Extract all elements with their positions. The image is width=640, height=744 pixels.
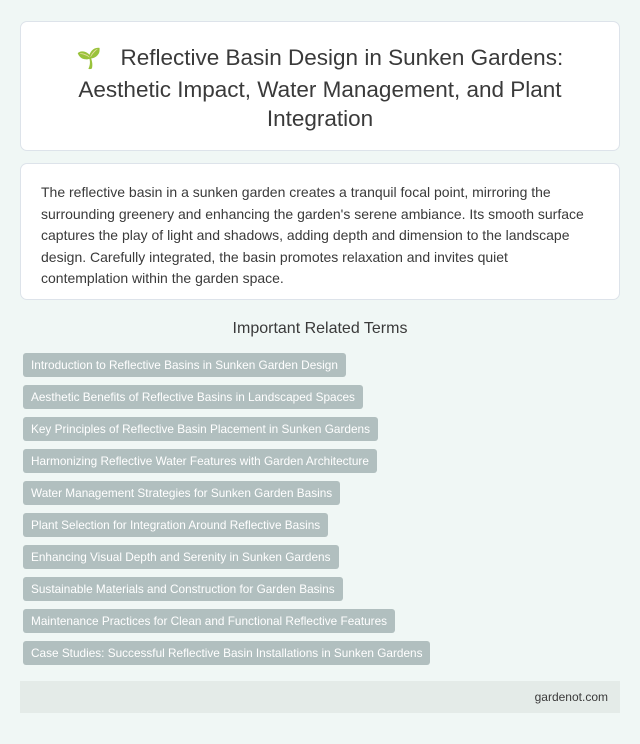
tag 5: [23, 481, 340, 505]
tag 3: Key Principles of Reflective Basin Placement in Sunken Gardens: [31, 422, 370, 436]
tag 8: [23, 577, 343, 601]
description card: [20, 163, 620, 300]
tag 10: Case Studies: Successful Reflective Basin Installations in Sunken Gardens: [31, 646, 422, 660]
tag 1: Introduction to Reflective Basins in Sunken Garden Design: [31, 358, 338, 372]
tag 2: [23, 385, 363, 409]
tag 8: Sustainable Materials and Construction for Garden Basins: [31, 582, 335, 596]
tag 6: Plant Selection for Integration Around Reflective Basins: [31, 518, 320, 532]
tag 6: [23, 513, 328, 537]
tag 1: [23, 353, 346, 377]
tag 2: Aesthetic Benefits of Reflective Basins in Landscaped Spaces: [31, 390, 355, 404]
tag 10: [23, 641, 430, 665]
tag 9: Maintenance Practices for Clean and Functional Reflective Features: [31, 614, 387, 628]
tag 5: Water Management Strategies for Sunken Garden Basins: [31, 486, 332, 500]
tag 7: [23, 545, 338, 569]
description card: The reflective basin in a sunken garden creates a tranquil focal point, mirroring the surrounding greenery and enhancing the garden's serene ambiance. Its smooth surface captures the play of light and shadows, adding depth and dimension to the landscape design. Carefully integrated, the basin promotes relaxation and invites quiet contemplation within the garden space.: [41, 184, 584, 286]
tag 7: Enhancing Visual Depth and Serenity in Sunken Gardens: [31, 550, 330, 564]
title: Aesthetic Impact, Water Management, and Plant: [78, 76, 562, 102]
related terms heading: Important Related Terms: [233, 320, 407, 337]
title: [77, 45, 563, 131]
title: 🌱 Reflective Basin Design in Sunken Gardens:: [77, 45, 563, 70]
tag 4: [23, 449, 377, 473]
tag 4: Harmonizing Reflective Water Features with Garden Architecture: [31, 454, 369, 468]
footer: [20, 681, 620, 713]
tag 9: [23, 609, 395, 633]
title card: [20, 21, 620, 151]
tag 3: [23, 417, 378, 441]
footer: gardenot.com: [535, 690, 608, 704]
title: Integration: [267, 106, 373, 131]
